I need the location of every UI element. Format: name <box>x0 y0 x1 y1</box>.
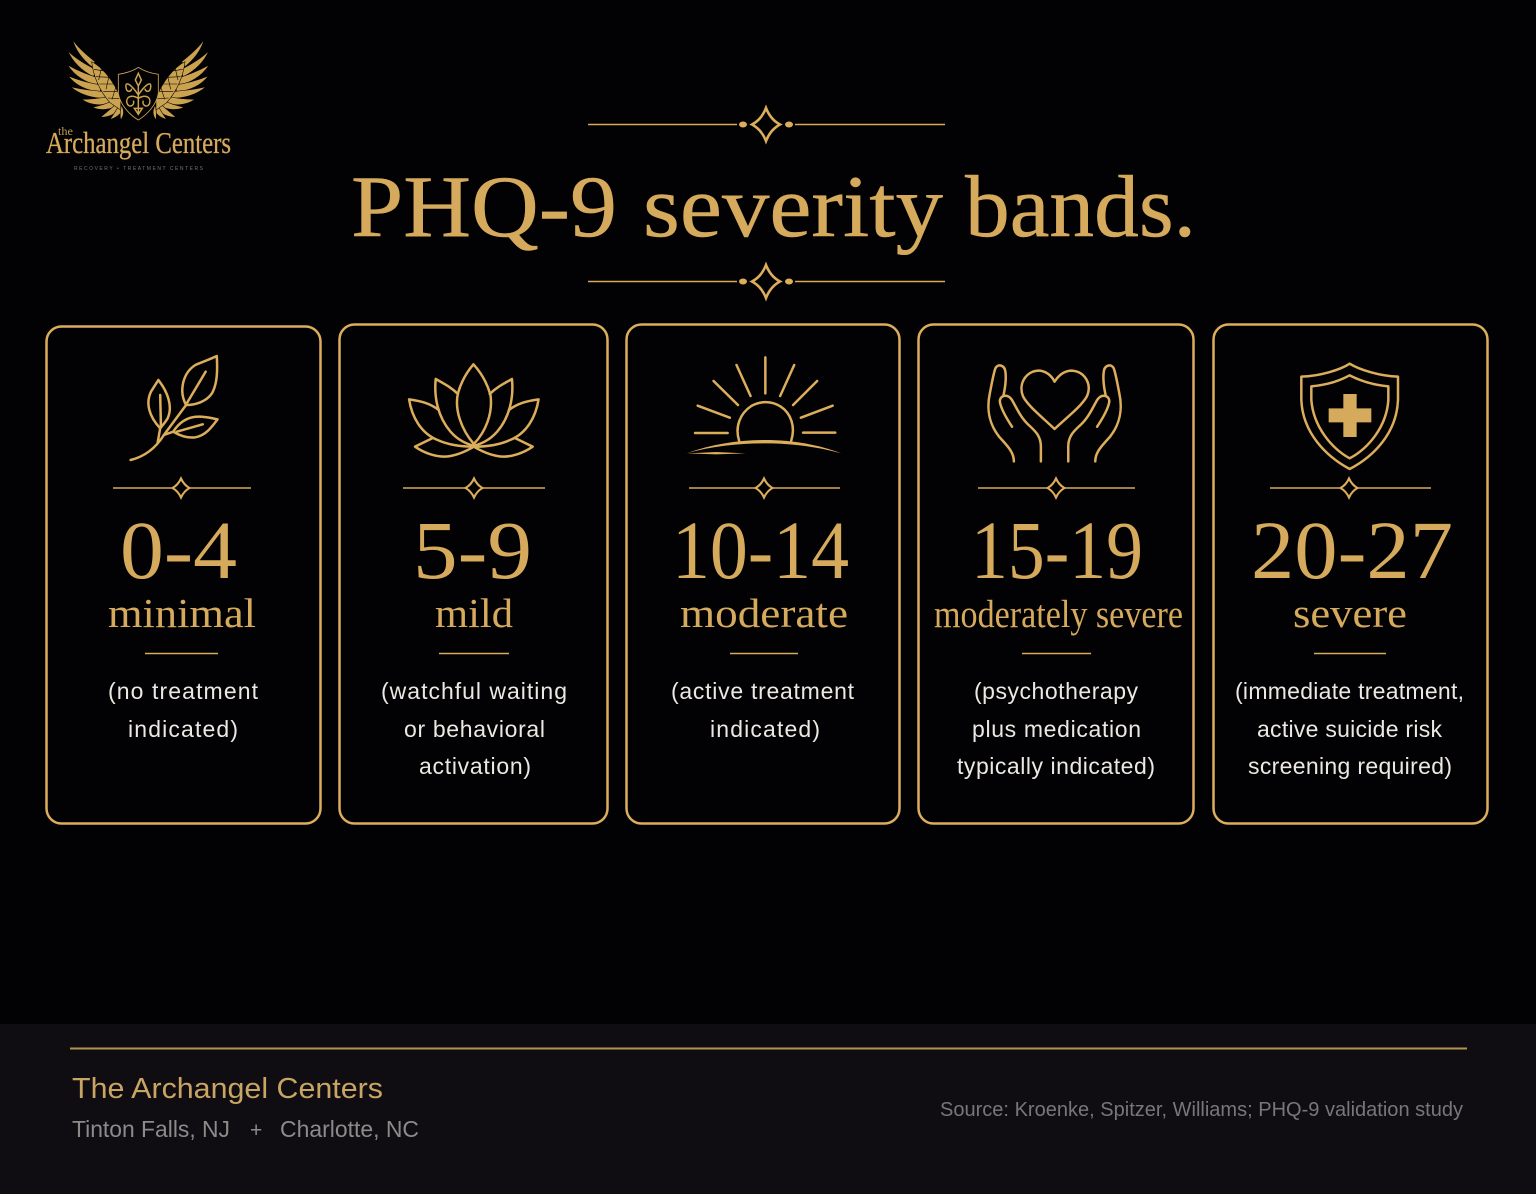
guidance text: activation) <box>419 753 531 779</box>
severity label: severe <box>1293 590 1407 636</box>
icon: sunrise <box>687 357 841 454</box>
divider <box>113 478 251 498</box>
score range: 5-9 <box>413 504 532 596</box>
title: severity <box>643 159 943 256</box>
panel: severe 20-27 <box>1214 324 1488 824</box>
logo word: the: the <box>58 124 73 138</box>
severity label: mild <box>435 590 513 636</box>
score range: 10-14 <box>672 504 849 596</box>
score range: 15-19 <box>971 504 1143 596</box>
divider <box>689 478 840 498</box>
guidance text: indicated) <box>710 716 820 742</box>
severity label: moderately severe <box>934 593 1183 636</box>
guidance text <box>957 678 1155 779</box>
icon: lotus <box>409 364 539 457</box>
score range: 0-4 <box>120 504 237 596</box>
footer <box>0 1024 1536 1194</box>
guidance text <box>671 678 855 742</box>
guidance text: (watchful waiting <box>381 678 567 704</box>
footer brand name: The Archangel Centers <box>72 1073 383 1105</box>
guidance text: (no treatment <box>108 678 259 704</box>
guidance text: active suicide risk <box>1257 716 1442 742</box>
divider <box>1270 478 1431 498</box>
source note: Source: Kroenke, Spitzer, Williams; PHQ-9 validation study <box>940 1099 1463 1121</box>
title: bands. <box>965 159 1196 256</box>
guidance text <box>1235 678 1464 779</box>
panel: moderate 10-14 <box>626 324 900 824</box>
top ornament <box>588 108 945 141</box>
logo: The Archangel Centers <box>46 39 231 172</box>
icon: shield with cross <box>1301 364 1398 469</box>
footer locations: + <box>250 1119 262 1142</box>
guidance text: typically indicated) <box>957 753 1155 779</box>
panel: minimal 0-4 <box>46 326 320 824</box>
guidance text <box>108 678 259 742</box>
divider <box>978 478 1135 498</box>
divider <box>403 478 545 498</box>
guidance text: indicated) <box>128 716 238 742</box>
guidance text: (immediate treatment, <box>1235 678 1464 704</box>
guidance text: or behavioral <box>404 716 545 742</box>
footer locations: Charlotte, NC <box>280 1116 419 1142</box>
logo tagline: RECOVERY • TREATMENT CENTERS <box>74 166 204 172</box>
title: PHQ-9 <box>351 159 617 256</box>
icon: leaf sprig <box>131 356 218 460</box>
guidance text: (active treatment <box>671 678 855 704</box>
panel: moderately severe 15-19 <box>918 324 1194 824</box>
guidance text: plus medication <box>972 716 1141 742</box>
score range: 20-27 <box>1251 504 1453 596</box>
severity label: minimal <box>108 590 256 636</box>
footer locations: Tinton Falls, NJ <box>72 1116 230 1142</box>
guidance text: screening required) <box>1248 753 1452 779</box>
bottom ornament <box>588 265 945 298</box>
severity label: moderate <box>680 590 848 636</box>
footer locations <box>72 1116 419 1142</box>
title <box>351 159 1196 256</box>
icon: hands holding heart <box>988 365 1121 461</box>
panel: mild 5-9 <box>340 324 608 824</box>
logo wordmark: Archangel Centers <box>46 125 231 160</box>
icon: winged shield <box>68 39 209 120</box>
guidance text <box>381 678 567 779</box>
guidance text: (psychotherapy <box>974 678 1138 704</box>
